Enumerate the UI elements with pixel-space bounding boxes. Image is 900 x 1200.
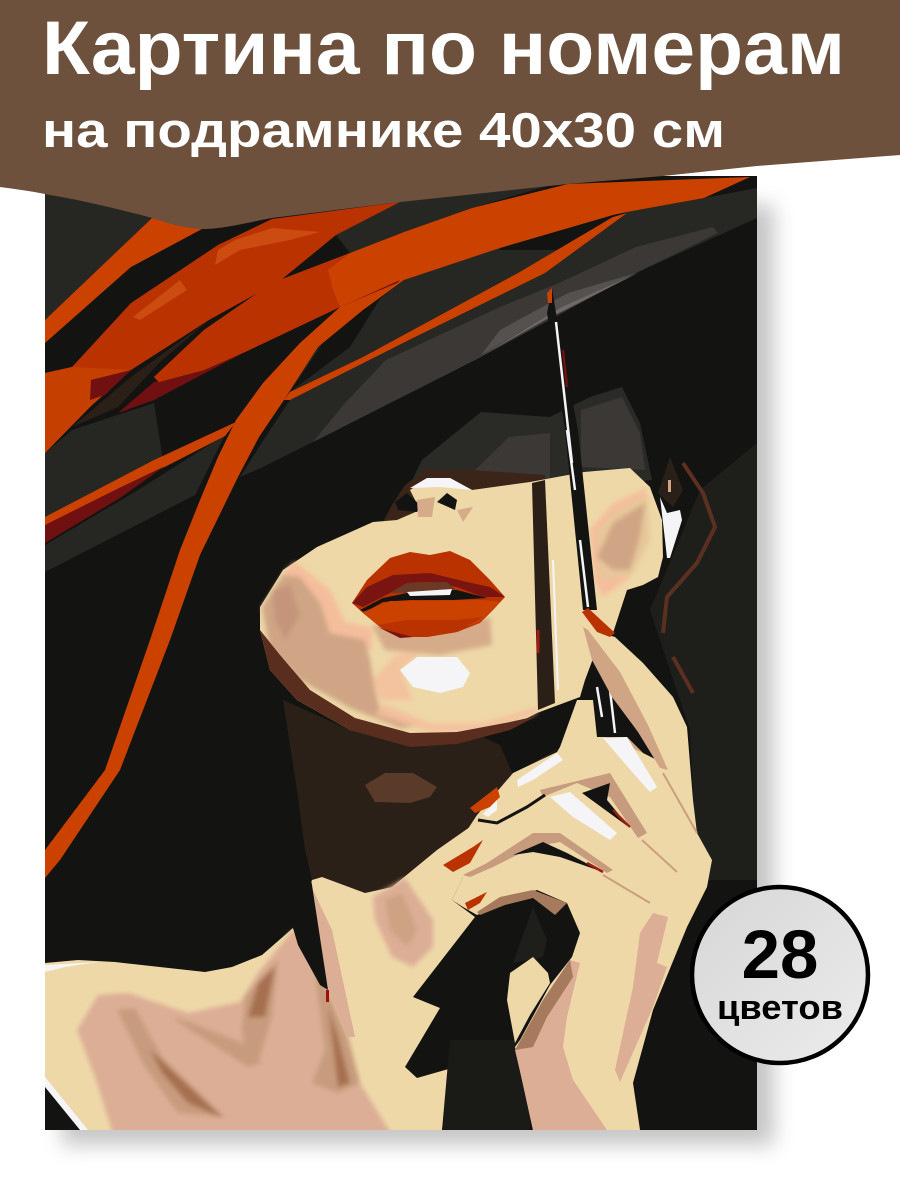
hat shadow above face <box>413 387 652 481</box>
dark stripe between B and C <box>72 320 209 427</box>
palm shading <box>515 960 607 1130</box>
chest shading <box>77 878 433 1140</box>
neck and shoulder <box>45 822 500 1140</box>
branch stripe F <box>45 422 236 530</box>
chin white highlight <box>400 657 470 693</box>
subtitle: на подрамнике 40х30 см <box>42 104 725 158</box>
earring <box>658 457 683 558</box>
big curved stripe E <box>45 280 404 878</box>
left cheek shadow <box>262 575 420 728</box>
badge: 28 colours: цветов <box>717 989 843 1027</box>
soft skin shading <box>262 488 650 732</box>
first finger gap <box>540 773 647 838</box>
neck notch <box>293 882 328 990</box>
hand <box>443 608 712 1130</box>
index finger shading <box>583 627 668 770</box>
hat brim band <box>240 188 757 477</box>
stripe B <box>45 202 400 453</box>
title: Картина по номерам <box>42 6 845 91</box>
badge: 28 colours: 28 <box>742 916 818 993</box>
chin highlight <box>373 652 420 700</box>
second finger gap <box>463 833 613 877</box>
wrist shading <box>615 913 668 1082</box>
hair fringe <box>383 470 545 522</box>
nose <box>410 478 472 490</box>
black area between chin and hand <box>484 715 556 774</box>
cigarette holder <box>547 288 620 737</box>
ear cheek <box>590 488 647 597</box>
hair between fingers and neck <box>452 877 480 917</box>
third finger shading <box>477 890 567 915</box>
tendon lines <box>603 773 697 903</box>
painting background <box>45 176 757 1130</box>
finger highlights <box>517 753 563 787</box>
hat orange stripes <box>45 177 750 878</box>
neck shadow <box>283 700 557 893</box>
white highlights <box>45 962 98 972</box>
stripe C <box>154 177 750 382</box>
thin stripe D <box>284 213 627 400</box>
black wedge inside hat <box>290 299 380 392</box>
cheek peach edge <box>283 562 372 650</box>
chin edge shadow <box>260 630 537 747</box>
header banner <box>0 0 900 229</box>
dark red under stripe C <box>118 352 245 413</box>
under lip shadow <box>372 618 492 655</box>
badge: 28 colours <box>692 887 868 1063</box>
gap under the palm <box>507 907 550 1043</box>
dark grey background panel on the right <box>650 443 757 880</box>
stripe A <box>45 218 202 343</box>
canvas drop shadow <box>62 205 774 1145</box>
hat top grey areas <box>45 180 613 572</box>
face <box>260 468 663 747</box>
vertical shadow stripe on face <box>532 480 558 710</box>
painting on canvas <box>45 176 757 1140</box>
jaw peach band <box>375 703 537 732</box>
lips <box>352 551 505 638</box>
hair wisp <box>663 463 715 693</box>
nails <box>582 608 615 637</box>
hair behind hand <box>442 1040 530 1130</box>
